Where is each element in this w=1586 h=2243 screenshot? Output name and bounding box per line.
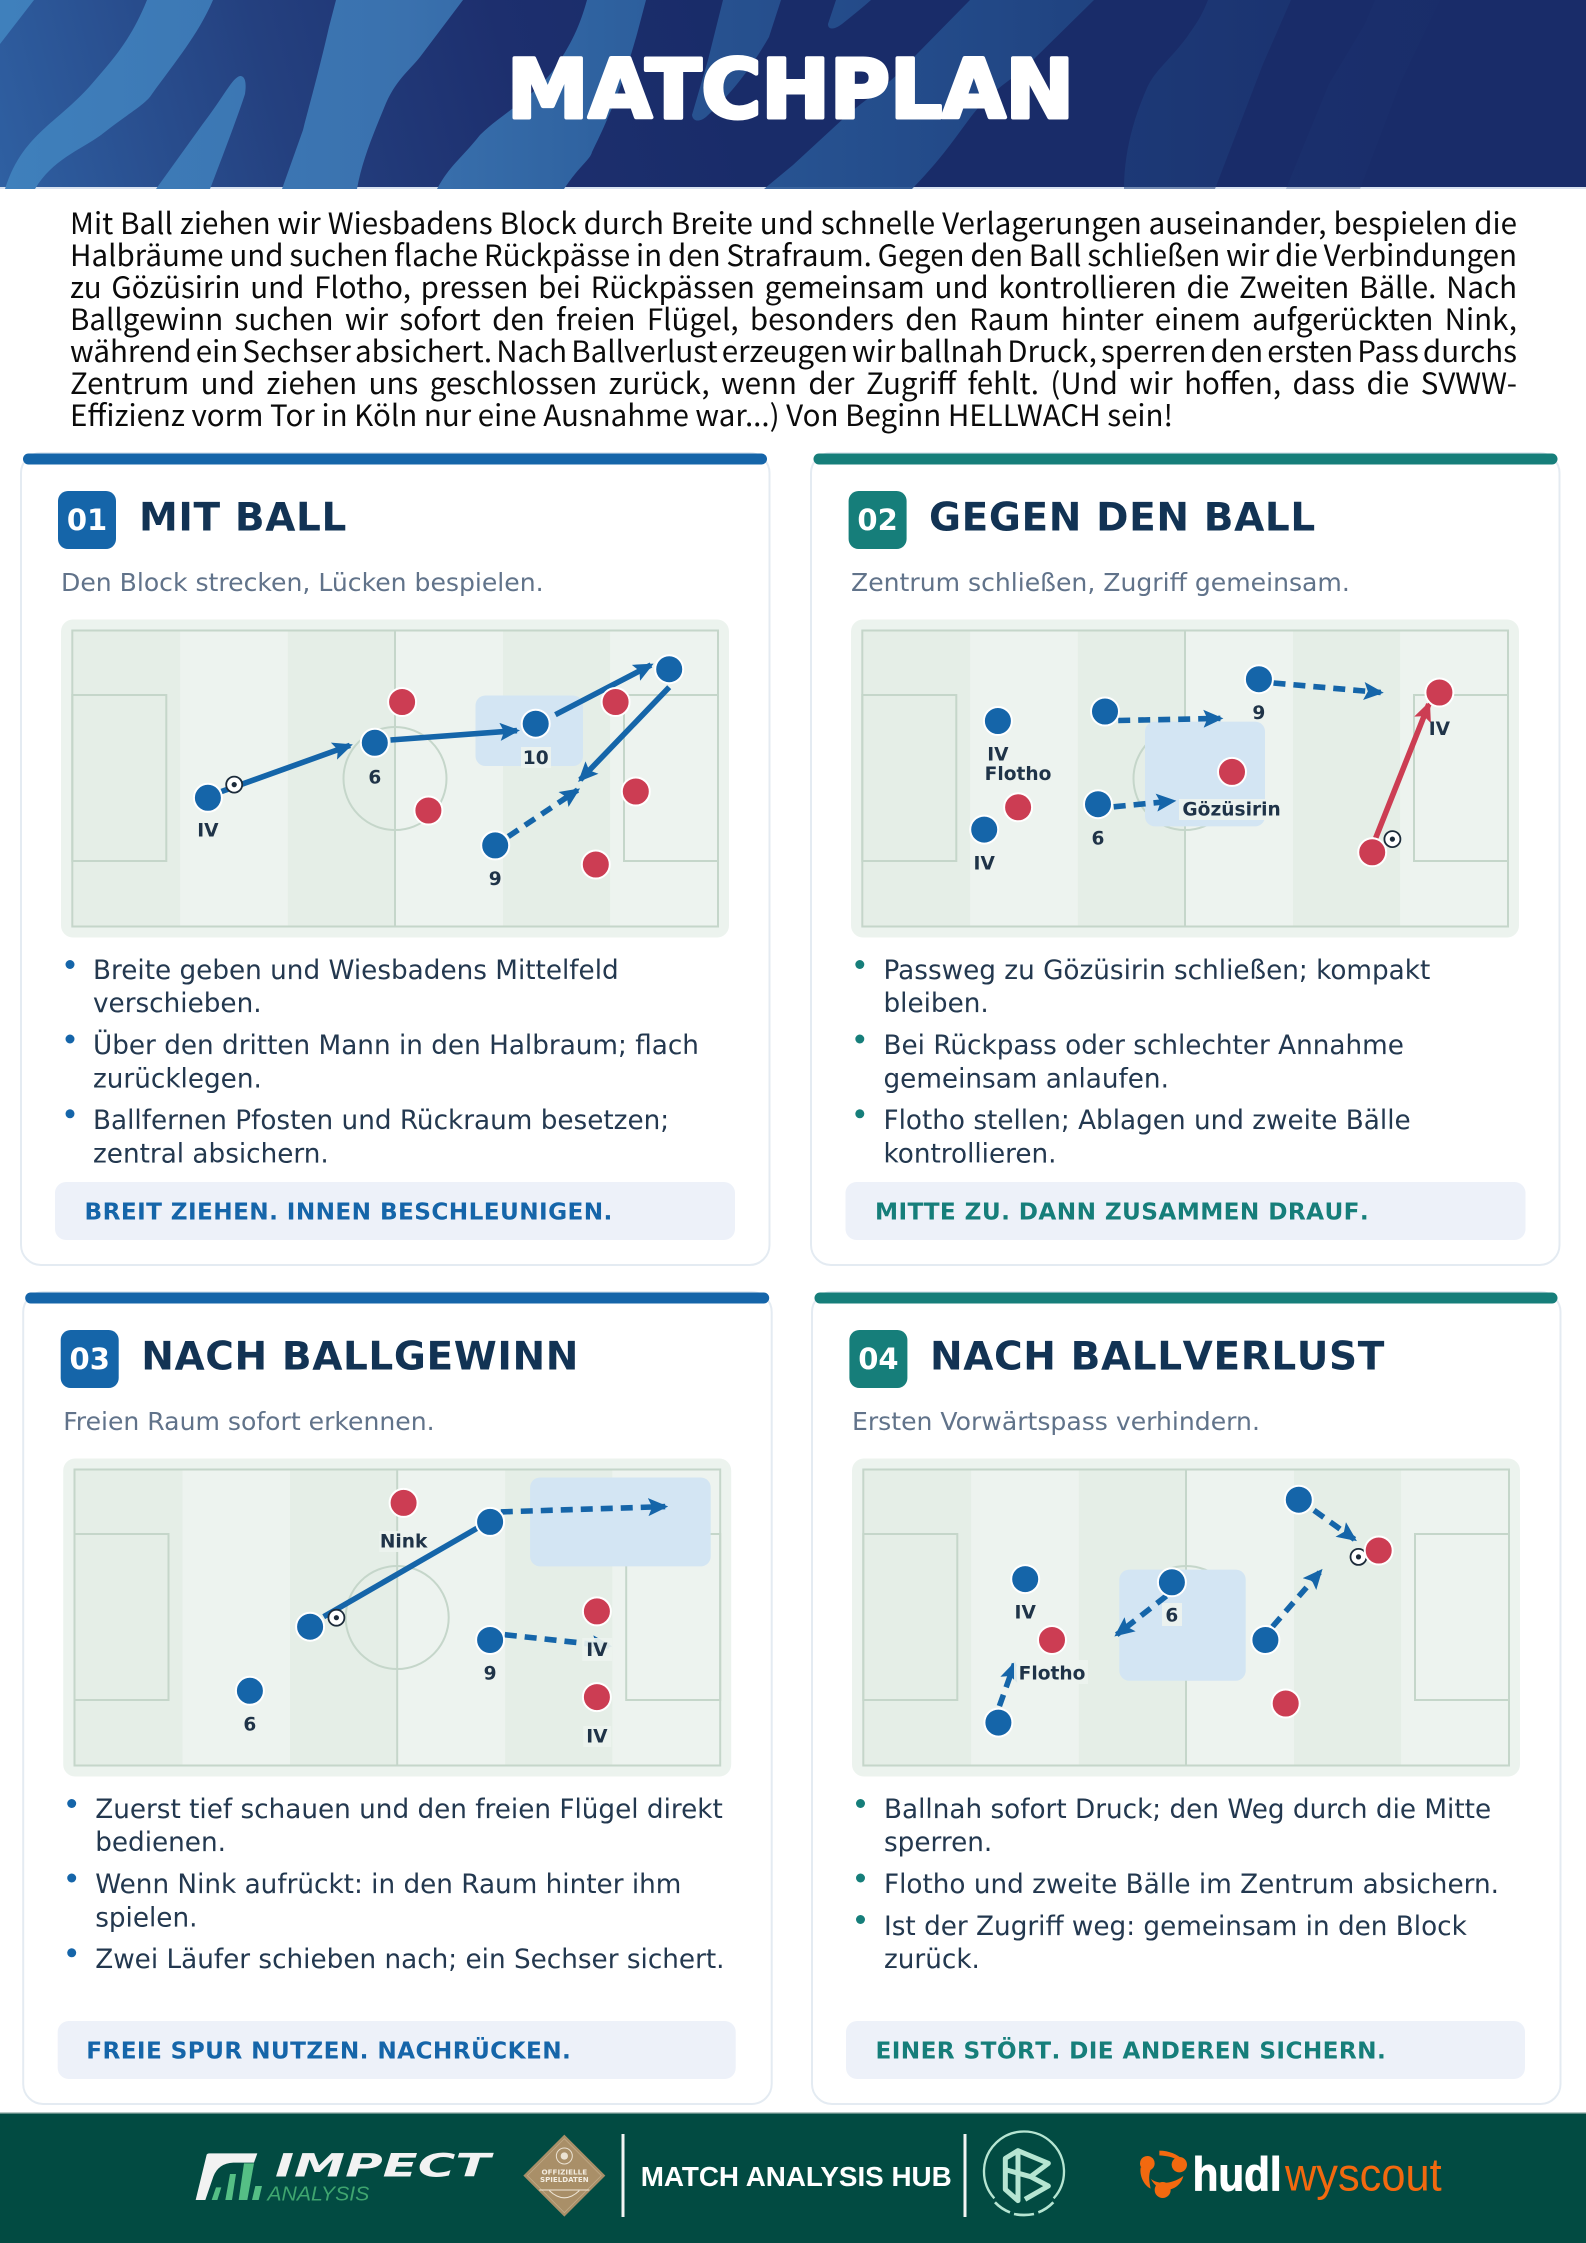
subtitle: Zentrum schließen, Zugriff gemeinsam.: [851, 568, 1350, 597]
subtitle: Ersten Vorwärtspass verhindern.: [852, 1407, 1260, 1436]
player labels: Flotho: [985, 764, 1051, 785]
pass arrows: [999, 1510, 1354, 1706]
opponents: [388, 688, 650, 878]
slogan: FREIE SPUR NUTZEN. NACHRÜCKEN.: [86, 2036, 571, 2064]
logo: dfb: [984, 2132, 1064, 2215]
header banner: [0, 0, 1586, 189]
subtitle: Freien Raum sofort erkennen.: [63, 1407, 435, 1436]
bullet list: zurücklegen.: [93, 1064, 262, 1094]
intro text block: zu Gözüsirin und Flotho, pressen bei Rückpässen gemeinsam und kontrollieren die Zweiten Bälle. Nach: [70, 265, 1517, 307]
accent bar: [23, 454, 767, 464]
own players: [194, 655, 683, 859]
bullet list: bleiben.: [884, 989, 989, 1019]
heading: NACH BALLVERLUST: [930, 1334, 1385, 1380]
logo: offizielle spieldaten badge: OFFIZIELLE: [541, 2168, 588, 2176]
title: MATCHPLAN: [507, 44, 1074, 138]
player labels: IV: [1015, 1602, 1036, 1623]
pitch diagram: [63, 1458, 731, 1776]
pitch diagram: [61, 620, 729, 938]
intro text block: Ballgewinn suchen wir sofort den freien Flügel, besonders den Raum hinter einem aufgerückten Nink,: [70, 297, 1517, 339]
bullet list: gemeinsam anlaufen.: [884, 1064, 1169, 1094]
bullet list: sperren.: [884, 1828, 992, 1858]
intro text block: Mit Ball ziehen wir Wiesbadens Block durch Breite und schnelle Verlagerungen auseinander, bespielen die: [70, 201, 1517, 243]
player labels: 6: [1092, 828, 1104, 849]
bullet list: Über den dritten Mann in den Halbraum; flach: [93, 1029, 699, 1061]
player labels: 9: [489, 869, 502, 890]
accent bar: [25, 1292, 769, 1304]
own players: [970, 665, 1273, 844]
ball: [328, 1610, 344, 1626]
panel: 03 nach ballgewinn: [23, 1292, 772, 2104]
background waves: [0, 0, 1440, 189]
footer bar: [0, 2112, 1586, 2243]
bullet list: spielen.: [95, 1904, 197, 1934]
logo: hudl wyscout: hudl: [1193, 2149, 1282, 2202]
bullet list: Zuerst tief schauen und den freien Flügel direkt: [95, 1795, 723, 1825]
text: match analysis hub: MATCH ANALYSIS HUB: [641, 2161, 952, 2192]
bullet list: Flotho stellen; Ablagen und zweite Bälle: [884, 1106, 1411, 1136]
accent bar: [814, 454, 1558, 464]
player labels: [243, 1531, 612, 1748]
intro text block: [70, 201, 1517, 435]
player labels: IV: [987, 745, 1009, 766]
logo: hudl wyscout: [1140, 2149, 1442, 2202]
bullet list: zurück.: [884, 1945, 980, 1975]
own players: [236, 1508, 504, 1705]
divider right: [964, 2134, 966, 2217]
player labels: IV: [1429, 719, 1451, 740]
highlight zone: [1145, 722, 1265, 826]
slogan: BREIT ZIEHEN. INNEN BESCHLEUNIGEN.: [84, 1198, 613, 1225]
own players: [984, 1486, 1313, 1737]
intro text block: Halbräume und suchen flache Rückpässe in den Strafraum. Gegen den Ball schließen wir die Verbindungen: [70, 233, 1517, 275]
player labels: [197, 747, 551, 890]
player labels: 10: [523, 748, 549, 769]
slogan: [846, 1182, 1526, 1240]
opponents: [390, 1489, 611, 1711]
ball: [1350, 1549, 1366, 1565]
badge 01: 01: [67, 503, 107, 537]
divider left: [622, 2134, 624, 2217]
player labels: 6: [243, 1714, 256, 1736]
bullet list: bedienen.: [95, 1828, 226, 1858]
bullet list: Passweg zu Gözüsirin schließen; kompakt: [884, 956, 1430, 986]
pitch diagram: [852, 1458, 1520, 1776]
bullet list: Ist der Zugriff weg: gemeinsam in den Block: [884, 1912, 1468, 1942]
ball: [226, 777, 242, 793]
player labels: IV: [586, 1640, 608, 1661]
bullet list: [67, 1795, 725, 1975]
panel: 02 gegen den ball: [811, 453, 1560, 1265]
pass arrows: [1114, 683, 1429, 838]
badge 03: [61, 1330, 119, 1388]
player labels: IV: [974, 853, 995, 874]
bullet list: Breite geben und Wiesbadens Mittelfeld: [93, 956, 619, 986]
panel: 04 nach ballverlust: [812, 1292, 1560, 2104]
slogan: EINER STÖRT. DIE ANDEREN SICHERN.: [876, 2036, 1386, 2064]
logo: impect analysis: IMPECT: [275, 2147, 494, 2185]
bullet list: [856, 1795, 1499, 1975]
logo: impect analysis: ANALYSIS: [265, 2182, 370, 2205]
badge 03: 03: [70, 1342, 110, 1376]
logo: offizielle spieldaten badge: SPIELDATEN: [540, 2176, 589, 2184]
bullet list: Bei Rückpass oder schlechter Annahme: [884, 1031, 1404, 1061]
badge 01: [58, 491, 116, 549]
slogan: [846, 2021, 1525, 2079]
logo: offizielle spieldaten badge: [523, 2135, 605, 2217]
bullet list: Ballfernen Pfosten und Rückraum besetzen;: [93, 1106, 669, 1136]
pass arrows: [324, 1507, 665, 1646]
bullet list: [66, 956, 699, 1170]
bullet list: [855, 956, 1430, 1170]
heading: MIT BALL: [139, 496, 347, 540]
player labels: 9: [484, 1664, 497, 1685]
bullet list: verschieben.: [93, 989, 262, 1019]
slogan: [55, 1182, 735, 1240]
player labels: Gözüsirin: [1182, 799, 1281, 820]
player labels: Nink: [380, 1531, 428, 1552]
badge 04: 04: [858, 1342, 899, 1376]
panel: 01 mit ball: [21, 453, 770, 1265]
bullet list: Zwei Läufer schieben nach; ein Sechser sichert.: [95, 1945, 725, 1975]
player labels: 9: [1252, 703, 1265, 724]
pass arrows: [222, 665, 669, 836]
player labels: [1014, 1602, 1182, 1685]
intro text block: Effizienz vorm Tor in Köln nur eine Ausnahme war...) Von Beginn HELLWACH sein!: [70, 393, 1173, 435]
player labels: IV: [197, 820, 219, 841]
ball: [1384, 831, 1400, 847]
opponents: [1038, 1536, 1393, 1718]
player labels: 6: [368, 768, 381, 788]
badge 02: [849, 491, 907, 549]
slogan: MITTE ZU. DANN ZUSAMMEN DRAUF.: [875, 1198, 1369, 1225]
heading: NACH BALLGEWINN: [141, 1334, 579, 1380]
bullet list: zentral absichern.: [93, 1140, 329, 1170]
intro text block: Zentrum und ziehen uns geschlossen zurück, wenn der Zugriff fehlt. (Und wir hoffen, dass die SVWW-: [70, 361, 1517, 403]
badge 04: [849, 1330, 907, 1388]
heading: GEGEN DEN BALL: [929, 496, 1316, 540]
highlight zone: [1119, 1570, 1246, 1681]
player labels: 6: [1165, 1606, 1178, 1626]
bullet list: Ballnah sofort Druck; den Weg durch die Mitte: [884, 1795, 1491, 1825]
subtitle: Den Block strecken, Lücken bespielen.: [61, 568, 544, 597]
highlight zone: [530, 1478, 711, 1566]
logo: hudl wyscout: wyscout: [1284, 2149, 1442, 2201]
bullet list: kontrollieren.: [884, 1140, 1057, 1170]
player labels: IV: [586, 1727, 608, 1748]
highlight zone: [476, 696, 583, 766]
intro text block: während ein Sechser absichert. Nach Ballverlust erzeugen wir ballnah Druck, sperren den ersten Pass durchs: [70, 329, 1517, 371]
bullet list: Flotho und zweite Bälle im Zentrum absichern.: [884, 1870, 1499, 1900]
player labels: [974, 703, 1451, 874]
bullet list: Wenn Nink aufrückt: in den Raum hinter ihm: [95, 1870, 681, 1900]
slogan: [58, 2021, 736, 2079]
accent bar: [814, 1292, 1558, 1304]
badge 02: 02: [857, 503, 898, 537]
pitch diagram: [851, 620, 1519, 938]
logo: impect analysis: [196, 2147, 494, 2205]
opponents: [1004, 678, 1453, 866]
player labels: Flotho: [1019, 1664, 1085, 1685]
